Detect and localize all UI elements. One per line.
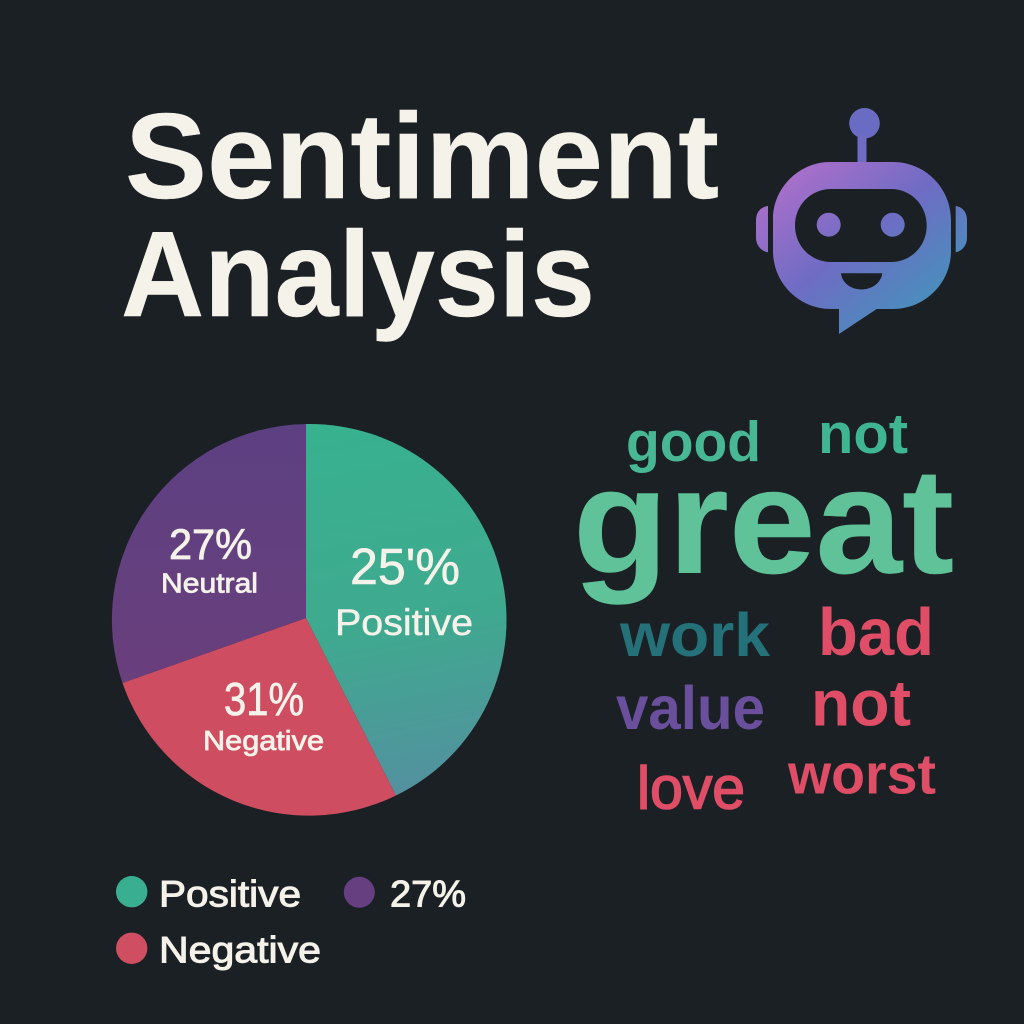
- word: love: love: [637, 754, 745, 821]
- label: neutral: [161, 521, 258, 599]
- word: bad: bad: [818, 595, 934, 670]
- word: worst: worst: [787, 742, 936, 806]
- legend: positive: Positive: [159, 874, 301, 915]
- label: negative: [203, 673, 324, 756]
- title: Analysis: [121, 206, 595, 342]
- label: neutral: 27%: [169, 521, 252, 569]
- word: good: good: [626, 410, 761, 474]
- label: negative: Negative: [203, 725, 324, 756]
- legend: 27%: 27%: [390, 874, 466, 915]
- label: positive: 25'%: [350, 538, 460, 595]
- title: [121, 88, 719, 342]
- word: not (red): not: [811, 667, 911, 740]
- word: value: value: [616, 674, 765, 742]
- legend: negative: Negative: [159, 930, 321, 971]
- pie chart: [112, 424, 507, 816]
- label: neutral: Neutral: [161, 568, 258, 599]
- word: not (green): not: [818, 402, 908, 466]
- icon: robot chat bubble: [756, 108, 967, 334]
- word: work: work: [619, 601, 770, 669]
- word cloud: [573, 402, 954, 821]
- label: negative: 31%: [224, 673, 304, 725]
- slice: positive: [306, 424, 507, 796]
- legend: 27%: [344, 874, 466, 915]
- slice: neutral: [112, 424, 306, 683]
- slice: negative: [122, 618, 396, 816]
- title: Sentiment: [125, 88, 719, 224]
- word: great: great: [573, 437, 954, 605]
- legend: [116, 874, 466, 971]
- label: positive: Positive: [335, 602, 473, 643]
- label: positive: [335, 538, 473, 643]
